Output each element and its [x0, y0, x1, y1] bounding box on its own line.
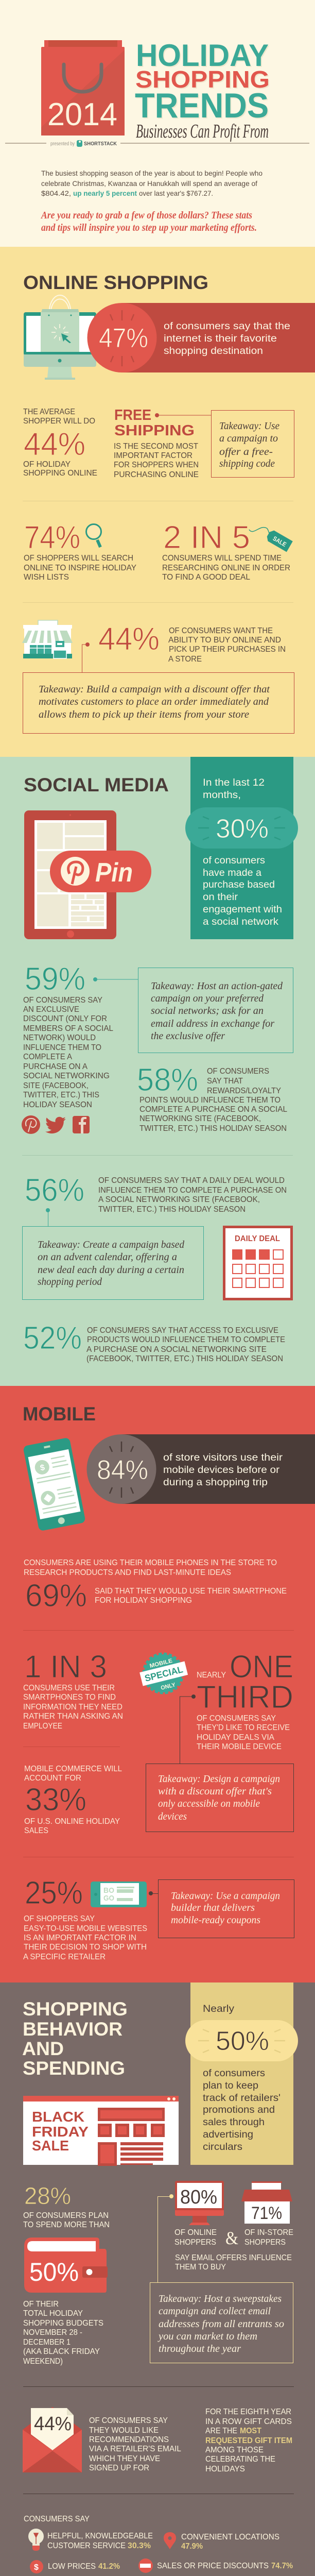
stat: 1 in 3: INFORMATION THEY NEED	[23, 1703, 122, 1711]
stat: low prices	[48, 2562, 120, 2571]
icon: tablet with pinterest board	[24, 810, 151, 939]
stat: 25 percent: IS AN IMPORTANT FACTOR IN	[24, 1934, 136, 1942]
callout: takeaway mobile discount: with a discount offer that's	[158, 1786, 272, 1797]
heading: shopping behavior and spending: SPENDING	[23, 2058, 125, 2079]
intro text: $804.42,	[41, 189, 71, 197]
stat: 59 percent: MEMBERS OF A SOCIAL	[23, 1024, 113, 1033]
stat text: gift cards: CELEBRATING THE	[205, 2455, 275, 2464]
stat text: gift cards: IN A ROW GIFT CARDS	[205, 2417, 292, 2426]
stat: customer service: HELPFUL, KNOWLEDGEABLE	[47, 2532, 153, 2540]
stat: 74 percent: WISH LISTS	[24, 573, 69, 582]
callout: 30 percent column: In the last 12	[203, 777, 265, 788]
icon: location pin	[164, 2532, 176, 2549]
callout: 84 percent: of store visitors use their	[163, 1452, 283, 1463]
stat: 69 percent	[24, 1558, 287, 1614]
stat: 59 percent	[23, 961, 113, 1109]
icon: tablet with BOGO coupon: GO	[103, 1894, 114, 1903]
panel: header	[0, 0, 315, 247]
icon: store 71 percent: 71%	[251, 2204, 282, 2223]
stat: 59 percent: PURCHASE ON A	[23, 1062, 88, 1071]
stat: 44 percent buy online pick up in store: PICK UP THEIR PURCHASES IN	[169, 645, 286, 654]
stat text: email recommendations: THEY WOULD LIKE	[89, 2426, 159, 2435]
callout: takeaway advent calendar: on an advent calendar, offering a	[38, 1251, 177, 1263]
callout: 30 percent column: of consumers	[203, 855, 265, 866]
stat: 44 percent of holiday shopping online: 44%	[24, 427, 85, 462]
stat: 44 percent of holiday shopping online	[23, 408, 97, 478]
stat: 58 percent: REWARDS/LOYALTY	[207, 1087, 281, 1095]
callout: 50 percent column: promotions and	[203, 2105, 275, 2115]
callout: 50 percent column: Nearly	[203, 2004, 235, 2014]
stat: 58 percent: COMPLETE A PURCHASE ON A SOCIAL	[139, 1105, 287, 1114]
stat: 1 in 3	[23, 1649, 123, 1731]
stat: sales or price discounts: SALES OR PRICE DISCOUNTS	[157, 2562, 269, 2570]
callout: takeaway free shipping	[155, 410, 294, 477]
icon: smartphone	[23, 1437, 86, 1531]
icon: wallet with 50 percent	[24, 2238, 108, 2293]
icon: daily deal calendar: DAILY DEAL	[235, 1234, 280, 1243]
stat: 59 percent: TWITTER, ETC.) THIS	[23, 1091, 99, 1099]
call to action script	[40, 210, 257, 233]
callout: takeaway free shipping: Takeaway: Use	[219, 420, 279, 432]
stat: 44 percent buy online pick up in store: A STORE	[168, 655, 202, 664]
stat: 52 percent: PRODUCTS WOULD INFLUENCE THEM TO COMPLETE	[87, 1335, 285, 1344]
callout: 84 percent: mobile devices before or	[163, 1465, 280, 1476]
panel: online shopping	[0, 247, 315, 757]
stat: 44 percent buy online pick up in store: OF CONSUMERS WANT THE	[169, 626, 273, 635]
stat: 56 percent	[25, 1173, 287, 1214]
icon: dollar coin	[30, 2560, 43, 2573]
stat: nearly one third: ONE	[230, 1649, 293, 1685]
callout: 50 percent column: track of retailers'	[203, 2093, 281, 2104]
title: HOLIDAY	[136, 38, 269, 73]
icon: tablet with BOGO coupon	[91, 1882, 147, 1907]
stat: sales or price discounts: 74.7%	[271, 2562, 293, 2570]
stat text: of their total holiday budgets: SHOPPING BUDGETS	[23, 2319, 103, 2328]
icon: pin button	[50, 851, 151, 892]
stat text: of their total holiday budgets: DECEMBER 1	[23, 2338, 71, 2347]
callout: 50 percent column: 50%	[216, 2026, 269, 2056]
stat: 2 in 5: 2 IN 5	[163, 520, 250, 555]
callout: 84 percent: 84%	[97, 1455, 148, 1485]
callout: takeaway sweepstakes: campaign and collect email	[159, 2306, 271, 2317]
icon: light bulb	[28, 2529, 44, 2551]
stat: 59 percent: INFLUENCE THEM TO	[23, 1043, 101, 1052]
callout: 84 percent	[86, 1434, 315, 1504]
callout: takeaway action-gated campaign: campaign on your preferred	[151, 993, 264, 1004]
stat text: gift cards	[205, 2408, 292, 2473]
stat: nearly one third: THIRD	[197, 1680, 293, 1715]
stat: 33 percent: OF U.S. ONLINE HOLIDAY	[24, 1817, 120, 1826]
icon: daily deal calendar	[224, 1227, 291, 1299]
callout: takeaway action-gated campaign: email address in exchange for	[151, 1018, 274, 1029]
callout: takeaway sweepstakes: Takeaway: Host a sweepstakes	[159, 2293, 282, 2304]
stat: nearly one third: OF CONSUMERS SAY	[197, 1714, 276, 1723]
stat: 44 percent buy online pick up in store	[98, 621, 286, 664]
call to action script: Are you ready to grab a few of those dollars? These stats	[40, 210, 252, 221]
stat: 58 percent	[137, 1062, 287, 1133]
icon: tablet with BOGO coupon: BO	[103, 1886, 114, 1895]
callout: takeaway advent calendar: Takeaway: Create a campaign based	[38, 1239, 185, 1250]
title	[135, 38, 270, 125]
stat: 33 percent: SALES	[24, 1826, 48, 1835]
stat: free shipping: IMPORTANT FACTOR	[114, 451, 192, 460]
stat: nearly one third: NEARLY	[197, 1671, 226, 1680]
stat: nearly one third: THEY'D LIKE TO RECEIVE	[197, 1723, 290, 1732]
call to action script: and tips will inspire you to step up your marketing efforts.	[41, 222, 257, 233]
stat: 44 percent of holiday shopping online: SHOPPER WILL DO	[23, 417, 95, 426]
stat: 58 percent: 58%	[137, 1062, 198, 1098]
stat: 25 percent: OF SHOPPERS SAY	[24, 1914, 95, 1923]
panel: shopping behavior and spending	[0, 1982, 315, 2576]
presented by line: presented by	[50, 141, 75, 147]
callout: takeaway free shipping: shipping code	[219, 458, 275, 469]
stat text: email recommendations: OF CONSUMERS SAY	[89, 2416, 168, 2425]
icon: smartphone: $	[39, 1463, 46, 1473]
callout: takeaway free shipping: offer a free-	[219, 446, 273, 457]
stat: 52 percent: OF CONSUMERS SAY THAT ACCESS TO EXCLUSIVE	[87, 1326, 278, 1335]
stat: 58 percent: OF CONSUMERS	[207, 1067, 269, 1076]
stat: 2 in 5	[162, 520, 290, 582]
callout: 30 percent column: 30%	[216, 814, 269, 844]
callout: 30 percent column: a social network	[203, 917, 279, 927]
callout: 47 percent: of consumers say that the	[164, 321, 290, 332]
callout: takeaway action-gated campaign: Takeaway: Host an action-gated	[151, 980, 283, 992]
stat: 59 percent: AN EXCLUSIVE	[23, 1005, 79, 1014]
stat: 56 percent: OF CONSUMERS SAY THAT A DAILY DEAL WOULD	[98, 1176, 285, 1185]
icon: envelope with 44 percent: 44%	[34, 2413, 72, 2435]
stat: 56 percent: A SOCIAL NETWORKING SITE (FACEBOOK,	[98, 1195, 260, 1204]
callout: 50 percent column: of consumers	[203, 2068, 265, 2079]
stat: 56 percent: INFLUENCE THEM TO COMPLETE A PURCHASE ON	[98, 1186, 287, 1195]
stat: 44 percent buy online pick up in store: 44%	[98, 621, 160, 657]
callout: takeaway mobile discount: devices	[158, 1811, 187, 1822]
callout: takeaway campaign builder	[149, 1879, 294, 1938]
callout: 30 percent column: months,	[203, 790, 241, 801]
stat: convenient locations: 47.9%	[181, 2542, 203, 2551]
presented by line	[5, 140, 309, 147]
callout: takeaway sweepstakes: throughout the year	[159, 2343, 241, 2354]
stat text: email offers influence: SHOPPERS	[244, 2238, 286, 2247]
callout: 50 percent column: circulars	[203, 2142, 242, 2153]
callout: takeaway discount offer: motivates customers to place an order immediately and	[39, 696, 269, 707]
stat: 59 percent: DISCOUNT (ONLY FOR	[23, 1014, 107, 1023]
stat: nearly one third: HOLIDAY DEALS VIA	[197, 1733, 275, 1742]
panel: social media	[0, 757, 315, 1386]
icon: store front	[22, 620, 73, 658]
callout: takeaway advent calendar: shopping period	[38, 1276, 102, 1287]
callout: takeaway campaign builder: builder that delivers	[171, 1902, 255, 1913]
stat: 44 percent of holiday shopping online: THE AVERAGE	[23, 408, 75, 416]
stat text: gift cards: HOLIDAYS	[205, 2465, 245, 2473]
stat: 25 percent: 25%	[25, 1875, 83, 1911]
stat: 28 percent: 28%	[24, 2182, 71, 2209]
intro text: The busiest shopping season of the year is about to begin! People who	[41, 169, 262, 177]
stat: 2 in 5: CONSUMERS WILL SPEND TIME	[162, 554, 282, 563]
stat: 52 percent	[23, 1320, 285, 1363]
stat: free shipping: PURCHASING ONLINE	[114, 470, 199, 479]
callout: 30 percent column: on their	[203, 892, 238, 903]
stat: 69 percent: CONSUMERS ARE USING THEIR MOBILE PHONES IN THE STORE TO	[24, 1558, 277, 1567]
callout: 50 percent column: plan to keep	[203, 2080, 258, 2091]
stat: 56 percent: TWITTER, ETC.) THIS HOLIDAY SEASON	[98, 1205, 246, 1214]
callout: takeaway discount offer: allows them to pick up their items from your store	[39, 709, 249, 720]
stat text: email offers influence: SHOPPERS	[174, 2238, 216, 2247]
title: SHOPPING	[135, 66, 270, 93]
stat text: gift cards: REQUESTED GIFT ITEM	[205, 2436, 292, 2445]
stat: 52 percent: A PURCHASE ON A SOCIAL NETWORKING SITE	[86, 1345, 267, 1354]
stat: customer service: 30.3%	[128, 2541, 151, 2550]
stat text: email recommendations: WHICH THEY HAVE	[89, 2454, 160, 2463]
stat: 44 percent buy online pick up in store: ABILITY TO BUY ONLINE AND	[168, 636, 281, 645]
callout: 50 percent column: sales through	[203, 2117, 265, 2128]
intro text: celebrate Christmas, Kwanzaa or Hanukkah will spend an average of	[41, 179, 257, 188]
stat text: email offers influence: THEM TO BUY	[175, 2263, 226, 2272]
stat: 33 percent	[24, 1765, 122, 1835]
stat: 25 percent: THEIR DECISION TO SHOP WITH	[24, 1943, 147, 1952]
stat: free shipping: FOR SHOPPERS WHEN	[114, 461, 199, 469]
stat text: email offers influence: OF IN-STORE	[244, 2228, 293, 2237]
stat text: gift cards: AMONG THOSE	[205, 2446, 264, 2454]
callout: 50 percent column: advertising	[203, 2129, 253, 2140]
stat: 33 percent: ACCOUNT FOR	[24, 1774, 81, 1783]
stat text: email offers influence: OF ONLINE	[174, 2228, 217, 2237]
section: consumers say	[24, 2515, 293, 2576]
stat: convenient locations	[181, 2533, 279, 2551]
heading: shopping behavior and spending	[22, 1998, 128, 2079]
callout: 84 percent: during a shopping trip	[163, 1477, 268, 1488]
stat: 33 percent: 33%	[25, 1782, 86, 1818]
stat text: email recommendations: VIA A RETAILER'S EMAIL	[89, 2445, 181, 2453]
stat: 59 percent: 59%	[25, 961, 85, 997]
stat: 52 percent: (FACEBOOK, TWITTER, ETC.) THIS HOLIDAY SEASON	[86, 1354, 283, 1363]
callout: takeaway sweepstakes	[150, 2194, 293, 2363]
stat: 25 percent: EASY-TO-USE MOBILE WEBSITES	[24, 1924, 147, 1933]
stat text: of their total holiday budgets: OF THEIR	[23, 2300, 59, 2309]
heading: shopping behavior and spending: BEHAVIOR	[23, 2019, 122, 2040]
stat: free shipping: SHIPPING	[114, 422, 195, 439]
stat: 59 percent: HOLIDAY SEASON	[23, 1100, 92, 1109]
icon: red shopping bag with 2014: 2014	[47, 97, 117, 132]
intro text: up nearly 5 percent	[73, 189, 137, 197]
icon: pin button: Pin	[95, 858, 133, 888]
stat: nearly one third: THEIR MOBILE DEVICE	[197, 1742, 282, 1751]
callout: 47 percent: shopping destination	[164, 346, 263, 357]
stat: 69 percent: RESEARCH PRODUCTS AND FIND LAST-MINUTE IDEAS	[24, 1568, 231, 1577]
callout: 30 percent column: engagement with	[203, 904, 282, 915]
stat text: email offers influence	[174, 2228, 293, 2272]
stat: 44 percent of holiday shopping online: OF HOLIDAY	[23, 460, 71, 469]
callout: 47 percent: 47%	[99, 323, 148, 353]
icon: black friday sale web page: FRIDAY	[32, 2124, 89, 2140]
stat: convenient locations: CONVENIENT LOCATIONS	[181, 2533, 279, 2541]
stat text: email offers influence: SAY EMAIL OFFERS INFLUENCE	[175, 2253, 292, 2262]
icon: sale tag: SALE	[272, 535, 288, 548]
stat: 2 in 5: TO FIND A GOOD DEAL	[162, 573, 250, 582]
stat: free shipping: IS THE SECOND MOST	[114, 442, 199, 451]
stat text: email recommendations	[89, 2416, 181, 2472]
heading: shopping behavior and spending: AND	[22, 2038, 64, 2059]
stat: 74 percent: OF SHOPPERS WILL SEARCH	[24, 554, 133, 563]
callout: takeaway advent calendar: new deal each day during a certain	[38, 1264, 184, 1276]
heading: online shopping: ONLINE SHOPPING	[23, 272, 208, 293]
presented by line: SHORTSTACK	[84, 141, 117, 147]
panel: mobile	[0, 1386, 315, 1982]
stat: low prices: 41.2%	[98, 2562, 120, 2571]
stat text: gift cards: MOST	[240, 2427, 261, 2435]
stat: 58 percent: TWITTER, ETC.) THIS HOLIDAY SEASON	[139, 1124, 287, 1133]
icon: wallet with 50 percent: 50%	[29, 2258, 79, 2286]
callout: takeaway mobile discount	[146, 1694, 293, 1832]
heading: social media: SOCIAL MEDIA	[24, 774, 169, 795]
stat: 59 percent: SOCIAL NETWORKING	[23, 1072, 110, 1080]
icon: sale circle	[138, 2558, 153, 2573]
icon: mobile special only badge: MOBILE	[149, 1658, 173, 1669]
stat: 59 percent: OF CONSUMERS SAY	[23, 996, 102, 1005]
stat: 44 percent of holiday shopping online: SHOPPING ONLINE	[23, 469, 97, 478]
callout: 30 percent column	[185, 757, 298, 939]
stat: 1 in 3: SMARTPHONES TO FIND	[23, 1693, 116, 1702]
stat: 74 percent: ONLINE TO INSPIRE HOLIDAY	[24, 564, 136, 572]
callout: takeaway mobile discount: only accessible on mobile	[158, 1798, 260, 1809]
stat text: of their total holiday budgets	[23, 2300, 103, 2366]
stat: 69 percent: FOR HOLIDAY SHOPPING	[95, 1596, 192, 1605]
stat: customer service: CUSTOMER SERVICE	[47, 2541, 126, 2550]
stat text: of their total holiday budgets: (AKA BLACK FRIDAY	[23, 2347, 100, 2356]
stat: 25 percent	[23, 1875, 147, 1961]
icon: black friday sale web page	[23, 2096, 179, 2165]
stat: 28 percent	[23, 2182, 110, 2229]
intro text	[41, 169, 262, 197]
callout: takeaway discount offer	[23, 642, 294, 734]
stat: free shipping	[114, 407, 199, 479]
stat: free shipping: FREE	[114, 407, 151, 423]
stat: 74 percent: 74%	[24, 520, 80, 555]
stat: low prices: LOW PRICES	[48, 2562, 96, 2571]
icon: store 71 percent	[241, 2181, 292, 2224]
icon: mobile special only badge: SPECIAL	[144, 1664, 184, 1684]
callout: takeaway mobile discount: Takeaway: Design a campaign	[158, 1773, 280, 1785]
stat text: of their total holiday budgets: TOTAL HOLIDAY	[23, 2309, 83, 2318]
stat text: gift cards: ARE THE	[205, 2427, 237, 2435]
intro text: over last year's $767.27.	[139, 189, 213, 197]
callout: takeaway campaign builder: mobile-ready coupons	[171, 1914, 260, 1926]
stat: 2 in 5: RESEARCHING ONLINE IN ORDER	[162, 564, 290, 572]
callout: takeaway campaign builder: Takeaway: Use a campaign	[171, 1890, 280, 1902]
stat: 58 percent: NETWORKING SITE (FACEBOOK,	[139, 1114, 261, 1123]
stat text: gift cards: FOR THE EIGHTH YEAR	[205, 2408, 291, 2416]
icon: mobile special only badge	[139, 1654, 188, 1693]
stat: 56 percent: 56%	[25, 1173, 84, 1208]
callout: takeaway sweepstakes: you can market to them	[157, 2331, 257, 2342]
icon: monitor with shopping bag	[24, 295, 96, 380]
stat: 25 percent: A SPECIFIC RETAILER	[23, 1953, 106, 1961]
stat: 59 percent: NETWORK) WOULD	[23, 1033, 96, 1042]
callout: takeaway action-gated campaign: social networks; ask for an	[151, 1005, 264, 1016]
stat text: email recommendations: RECOMMENDATIONS	[89, 2435, 169, 2444]
stat: 59 percent: COMPLETE A	[23, 1053, 73, 1061]
heading: mobile: MOBILE	[23, 1403, 96, 1425]
callout: 47 percent	[87, 303, 315, 372]
section: consumers say: CONSUMERS SAY	[24, 2515, 90, 2523]
stat text: email offers influence: &	[225, 2228, 238, 2248]
icon: dollar coin: $	[34, 2563, 39, 2572]
icon: black friday sale web page: SALE	[32, 2138, 69, 2154]
stat text: email recommendations: SIGNED UP FOR	[89, 2464, 149, 2472]
heading: shopping behavior and spending: SHOPPING	[23, 1998, 128, 2020]
callout: takeaway free shipping: a campaign to	[219, 433, 278, 444]
stat: 52 percent: 52%	[23, 1320, 82, 1356]
icon: envelope with 44 percent	[23, 2407, 82, 2472]
stat: 1 in 3: CONSUMERS USE THEIR	[23, 1684, 115, 1692]
icon: monitor 80 percent: 80%	[180, 2187, 217, 2208]
stat: 1 in 3: EMPLOYEE	[23, 1722, 62, 1731]
icons: social networks	[22, 1115, 90, 1134]
icon: monitor 80 percent	[175, 2181, 224, 2225]
stat: 28 percent: TO SPEND MORE THAN	[23, 2221, 110, 2229]
icon: mobile special only badge: ONLY	[160, 1682, 177, 1691]
stat: 74 percent	[24, 520, 136, 582]
icon: magnifying glass	[86, 524, 101, 547]
callout: 50 percent column	[185, 1982, 298, 2165]
stat: 28 percent: OF CONSUMERS PLAN	[23, 2211, 109, 2220]
stat text: of their total holiday budgets: WEEKEND)	[23, 2357, 63, 2366]
callout: takeaway action-gated campaign	[93, 968, 293, 1053]
stat text: of their total holiday budgets: NOVEMBER 28 -	[23, 2328, 82, 2337]
callout: takeaway advent calendar	[23, 1208, 204, 1299]
stat: 58 percent: POINTS WOULD INFLUENCE THEM TO	[139, 1096, 281, 1105]
stat: 69 percent: 69%	[25, 1578, 87, 1614]
stat: 1 in 3: 1 IN 3	[24, 1649, 107, 1685]
callout: takeaway action-gated campaign: the exclusive offer	[151, 1030, 225, 1042]
stat: 59 percent: SITE (FACEBOOK,	[23, 1081, 89, 1090]
stat: customer service	[47, 2532, 153, 2550]
icon: black friday sale web page: BLACK	[32, 2109, 84, 2125]
stat: 69 percent: SAID THAT THEY WOULD USE THEIR SMARTPHONE	[95, 1587, 287, 1596]
stat: nearly one third	[197, 1649, 293, 1751]
icon: red shopping bag with 2014	[41, 40, 125, 135]
stat: 33 percent: MOBILE COMMERCE WILL	[24, 1765, 122, 1773]
stat: 1 in 3: RATHER THAN ASKING AN	[23, 1712, 123, 1721]
icon: sale tag	[249, 528, 293, 552]
title: TRENDS	[135, 86, 269, 125]
stat: 58 percent: SAY THAT	[207, 1077, 243, 1086]
callout: takeaway discount offer: Takeaway: Build a campaign with a discount offer that	[39, 684, 270, 695]
callout: takeaway sweepstakes: addresses from all entrants so	[159, 2318, 284, 2330]
callout: 30 percent column: purchase based	[203, 879, 275, 890]
callout: 47 percent: internet is their favorite	[164, 333, 277, 344]
callout: 30 percent column: have made a	[203, 868, 261, 878]
